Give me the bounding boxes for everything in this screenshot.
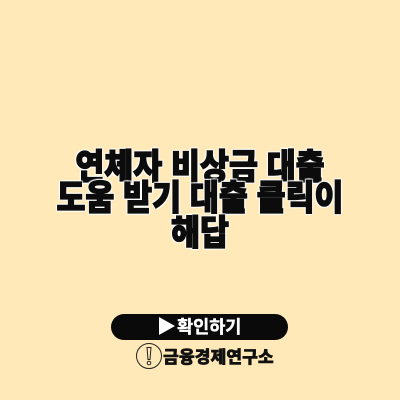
brand bbox=[136, 343, 274, 369]
title line 2: 도움 받기 대출 클릭이 bbox=[56, 179, 344, 218]
button: confirm bbox=[111, 314, 288, 340]
brand name: 금융경제연구소 bbox=[163, 347, 274, 367]
button label: 확인하기 bbox=[177, 317, 241, 337]
title line 1: 연체자 비상금 대출 bbox=[75, 148, 325, 187]
icon: exclamation circle bbox=[136, 343, 162, 369]
title line 3: 해답 bbox=[171, 214, 229, 253]
icon: play triangle bbox=[159, 317, 175, 335]
button content bbox=[159, 317, 241, 337]
